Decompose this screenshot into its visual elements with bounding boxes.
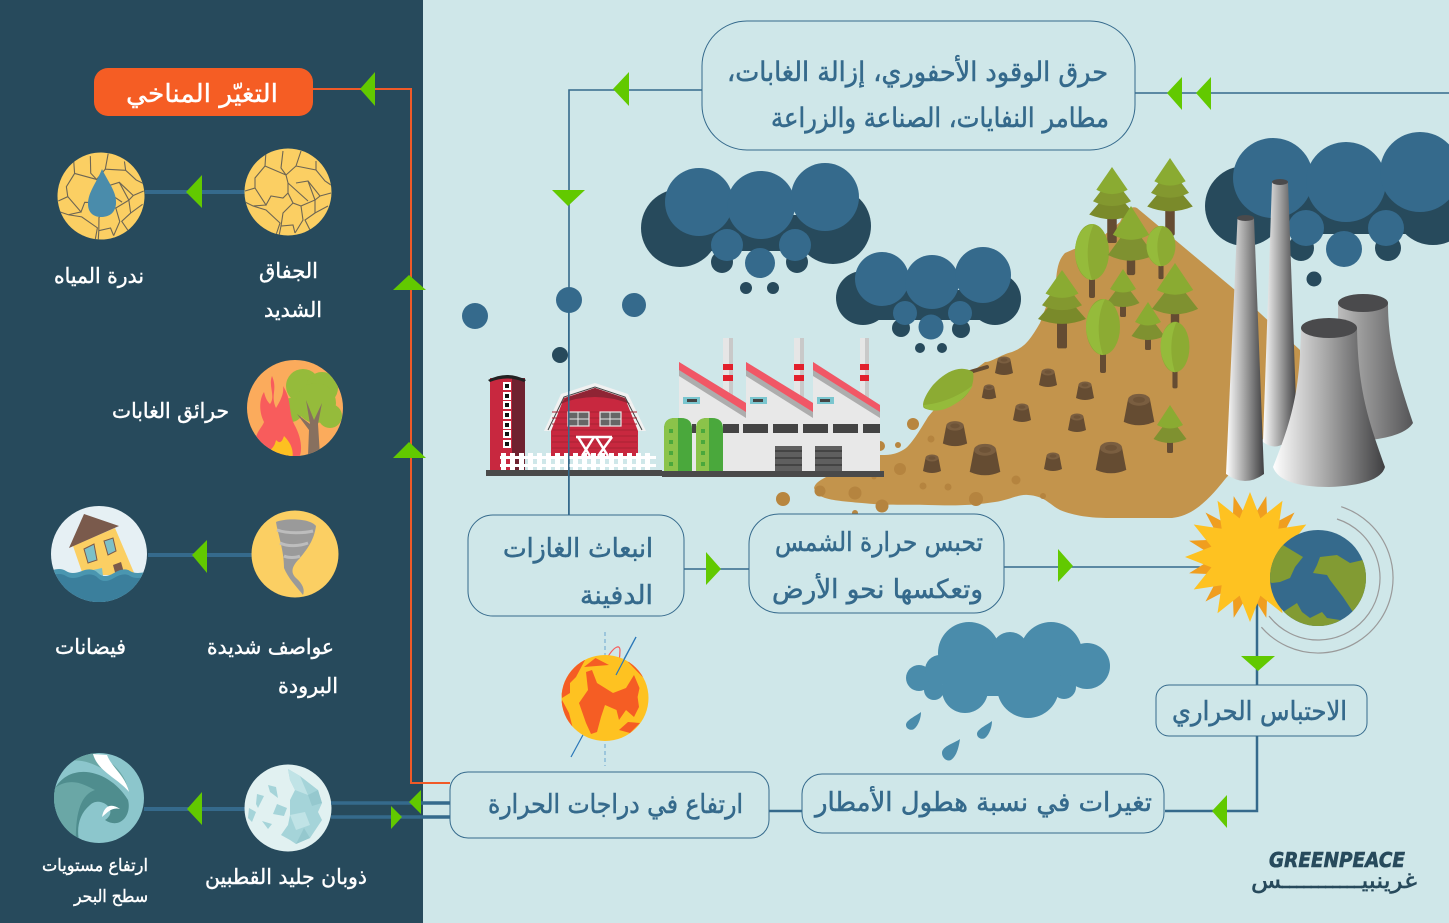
item: forest fires: [112, 360, 343, 460]
arrow: melt to sea level rise: [187, 792, 202, 825]
arrow: trap to sun: [1058, 549, 1073, 582]
earth: [1270, 530, 1366, 626]
illustration: power plant: [1226, 179, 1413, 487]
arrow: top right one: [1167, 77, 1182, 110]
label: sea level rise line two: سطح البحر: [73, 887, 148, 907]
tall stack two: [1226, 215, 1264, 481]
trees: [1038, 158, 1198, 453]
label: extreme drought line two: الشديد: [264, 298, 322, 322]
arrow: to ice upper: [409, 790, 421, 814]
logo: Greenpeace: غرينبيـــــــــــس: [1251, 869, 1417, 894]
label: cold storms line one: عواصف شديدة: [207, 635, 334, 659]
label: extreme drought line one: الجفاق: [259, 259, 318, 283]
box: causes: مطامر النفايات، الصناعة والزراعة: [771, 103, 1109, 134]
icon: extreme drought: [244, 148, 332, 236]
box: greenhouse gas emissions: [468, 515, 684, 616]
icon: tornado: [252, 510, 338, 598]
sawtooth roofs: [679, 362, 880, 418]
box: causes: [702, 21, 1135, 150]
arrow: up lower: [393, 442, 426, 458]
factory body: [679, 362, 880, 471]
arrow: to ice lower: [391, 806, 402, 829]
farm ground: [486, 470, 662, 476]
arrow: greenhouse to rain: [1212, 795, 1227, 828]
icon: rain cloud: [906, 622, 1110, 761]
heading: climate change: [94, 68, 313, 116]
illustration: factory: [662, 338, 884, 477]
item: polar melt and sea level rise: [42, 750, 367, 907]
sun: [1185, 492, 1315, 622]
logo: Greenpeace: [1251, 848, 1417, 894]
green tanks: [664, 418, 723, 471]
factory chimneys: [723, 338, 869, 408]
arrow: drought to scarcity: [186, 175, 202, 208]
box: temperature rise: ارتفاع في دراجات الحرارة: [488, 790, 743, 820]
icon: sea wave: [50, 750, 144, 845]
label: forest fires: حرائق الغابات: [112, 399, 229, 423]
radiating arcs: [1261, 507, 1393, 653]
tall stack one: [1263, 179, 1297, 446]
connectors: temperature to ice: [331, 803, 450, 817]
line over farm: [568, 300, 570, 515]
item: cold storms and floods: [50, 506, 338, 698]
label: polar ice melt: ذوبان جليد القطبين: [205, 865, 367, 889]
box: greenhouse effect: الاحتباس الحراري: [1172, 697, 1347, 727]
icon: melting polar ice: [244, 764, 332, 852]
arrow: gases to trap: [706, 552, 721, 585]
arrow: sun to greenhouse: [1241, 656, 1275, 671]
label: sea level rise line one: ارتفاع مستويات: [42, 856, 148, 876]
stumps: [923, 356, 1154, 475]
factory ground: [662, 471, 884, 477]
arrow: sources to smoke: [613, 72, 629, 106]
panel: climate change impacts: [0, 0, 423, 923]
arrow: storms to floods: [192, 540, 207, 573]
label: water scarcity: ندرة المياه: [54, 264, 144, 288]
arrow: to climate change label: [360, 72, 375, 106]
box: trapping heat: وتعكسها نحو الأرض: [772, 572, 983, 605]
arrow: top right two: [1196, 77, 1211, 110]
cloud: left smoke: [641, 163, 871, 294]
box: temperature rise: [450, 772, 769, 838]
barn: [544, 383, 646, 456]
icon: hot earth: [558, 632, 650, 766]
box: trapping heat: تحبس حرارة الشمس: [775, 528, 983, 558]
connector: orange climate line: [313, 89, 450, 783]
rear cooling tower: [1320, 294, 1413, 440]
box: rainfall changes: [802, 774, 1164, 833]
icon: flooded house: [50, 506, 150, 604]
icon: sun and earth: [1185, 492, 1393, 653]
label: cold storms line two: البرودة: [278, 674, 338, 698]
connectors: flow lines: [569, 90, 1449, 811]
cloud: middle smoke: [836, 247, 1021, 353]
box: trapping heat: [749, 514, 1004, 613]
icon: water scarcity: [52, 147, 150, 246]
illustration: farm: [486, 375, 662, 476]
dark window band: [692, 424, 880, 433]
arrow: downward to gases: [552, 190, 585, 206]
logo: Greenpeace: GREENPEACE: [1269, 848, 1405, 872]
icon: forest fire: [247, 360, 343, 460]
factory doors: [775, 446, 842, 471]
box: greenhouse gas emissions: الدفينة: [580, 581, 653, 611]
label: floods: فيضانات: [55, 635, 126, 659]
cloud: power plant smoke: [1205, 132, 1449, 286]
loose soil: [776, 418, 919, 516]
soil dots: [814, 436, 1046, 512]
roof windows: [683, 397, 834, 404]
smoke dots: [462, 287, 646, 363]
illustration: deforested hill: [776, 158, 1300, 518]
box: rainfall changes: تغيرات في نسبة هطول الأمطار: [813, 785, 1152, 818]
heading: climate change: التغيّر المناخي: [126, 79, 278, 108]
item: extreme drought and water scarcity: [52, 147, 331, 322]
box: greenhouse effect: [1156, 685, 1367, 736]
front cooling tower: [1273, 318, 1385, 487]
box: causes: حرق الوقود الأحفوري، إزالة الغابات،: [727, 54, 1108, 88]
fence: [500, 453, 656, 470]
leaf: [923, 367, 987, 411]
box: greenhouse gas emissions: انبعاث الغازات: [503, 534, 653, 564]
silo: [488, 375, 526, 470]
arrow: up upper: [393, 275, 426, 290]
